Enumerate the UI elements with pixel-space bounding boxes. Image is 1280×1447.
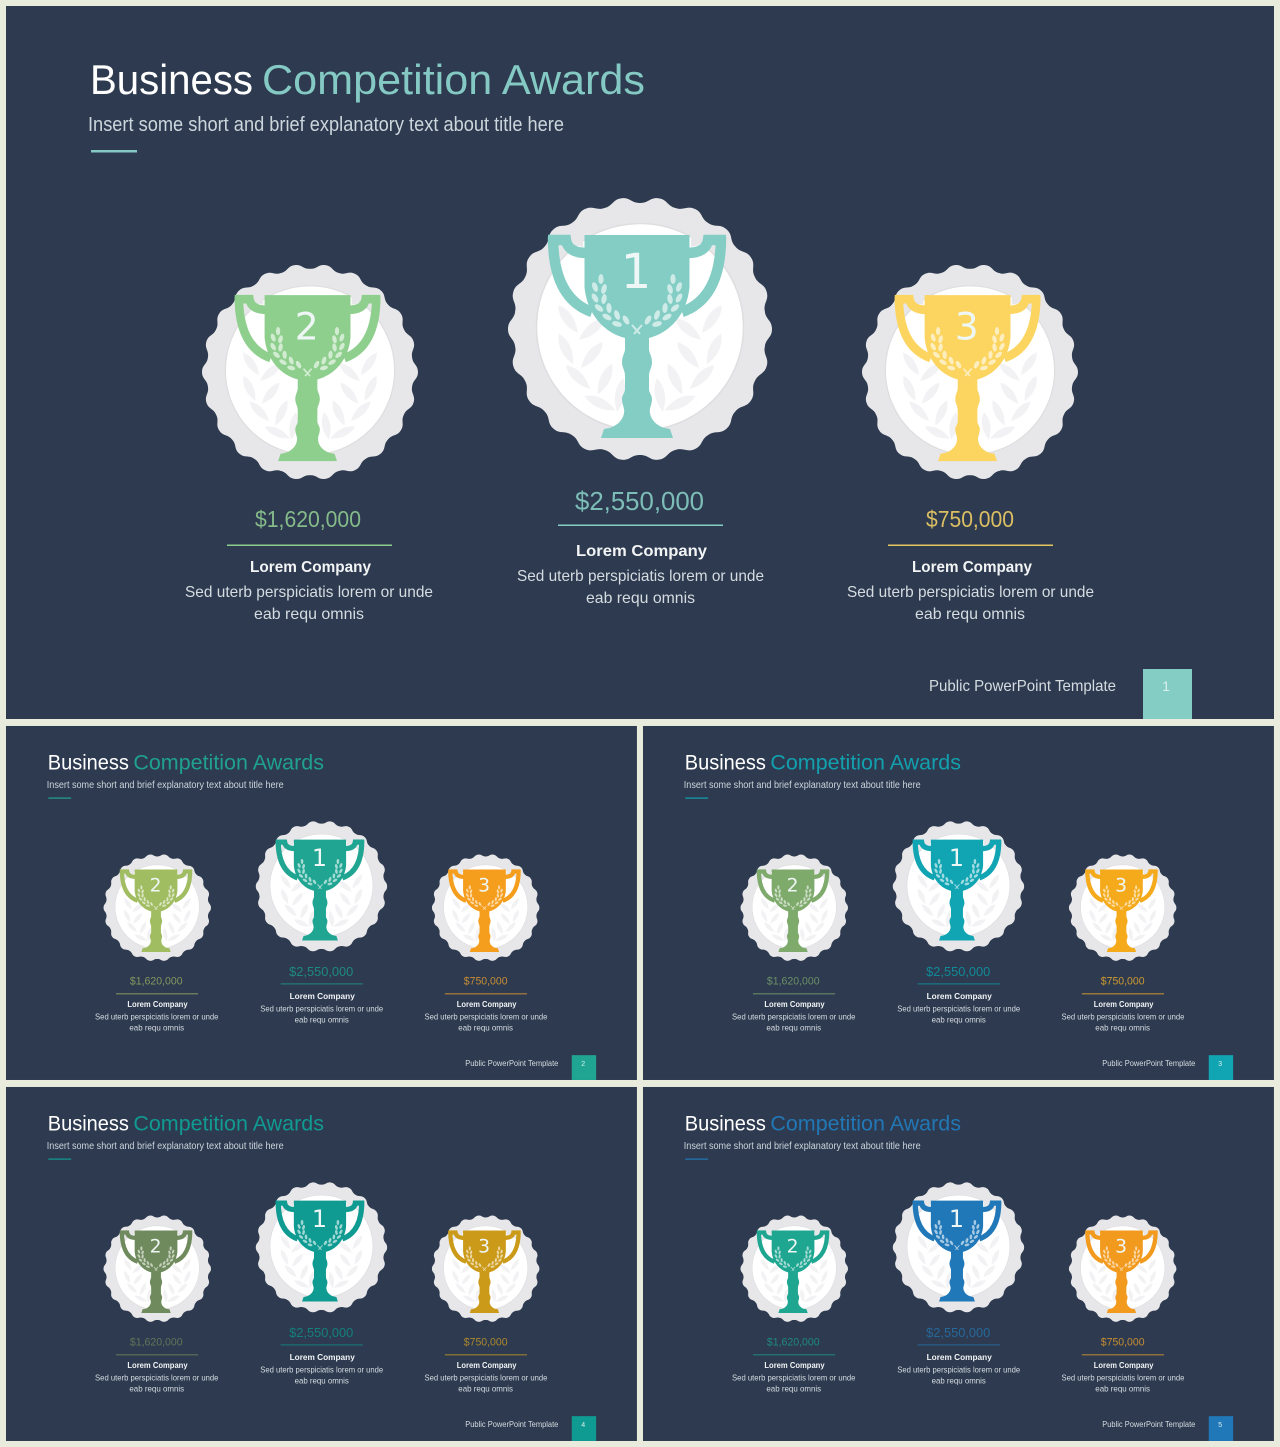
prize block 1: eab requ omnis <box>932 1015 986 1024</box>
prize block 2: Sed uterb perspiciatis lorem or unde <box>95 1373 219 1382</box>
prize block 1: $2,550,000 <box>926 1325 990 1340</box>
prize block 2: Lorem Company <box>250 559 371 576</box>
icon: trophy badge 3: 3 <box>1115 1236 1127 1257</box>
footer label: Public PowerPoint Template <box>465 1420 559 1429</box>
title accent line <box>685 797 708 799</box>
prize block 2: eab requ omnis <box>766 1023 821 1032</box>
prize block 2: Sed uterb perspiciatis lorem or unde <box>95 1012 219 1021</box>
prize block 1: Lorem Company <box>290 992 355 1001</box>
title: Competition Awards <box>770 752 961 775</box>
prize block 3: eab requ omnis <box>458 1023 513 1032</box>
icon: trophy badge 2 <box>187 250 433 494</box>
prize block 1: Sed uterb perspiciatis lorem or unde <box>897 1365 1021 1374</box>
icon: trophy badge 1 <box>884 1173 1033 1322</box>
prize block 1: Sed uterb perspiciatis lorem or unde <box>897 1004 1021 1013</box>
title: Business <box>48 752 129 775</box>
prize block 1: Lorem Company <box>576 543 707 560</box>
prize block 1 <box>260 1325 384 1385</box>
icon: trophy badge 2: 2 <box>150 875 162 896</box>
prize block 1 <box>260 964 384 1024</box>
footer label: Public PowerPoint Template <box>1102 1420 1196 1429</box>
title: Business <box>685 752 766 775</box>
page number box: 1 <box>1162 678 1170 694</box>
prize block 1: $2,550,000 <box>289 1325 353 1340</box>
icon: trophy badge 3: 3 <box>1115 875 1127 896</box>
icon: trophy badge 3 <box>1061 847 1184 968</box>
prize block 3: eab requ omnis <box>915 606 1025 623</box>
prize block 2: $1,620,000 <box>767 976 820 988</box>
prize block 2 <box>95 976 219 1032</box>
prize block 3: Lorem Company <box>457 1000 517 1009</box>
title accent line <box>48 1158 71 1160</box>
prize block 2 <box>732 1337 856 1393</box>
prize block 1: eab requ omnis <box>932 1376 986 1385</box>
prize block 3: Sed uterb perspiciatis lorem or unde <box>424 1373 548 1382</box>
title: Business <box>90 56 253 103</box>
footer label: Public PowerPoint Template <box>465 1059 559 1068</box>
title: Competition Awards <box>262 56 645 103</box>
prize block 3: Sed uterb perspiciatis lorem or unde <box>1061 1012 1185 1021</box>
icon: trophy badge 2: 2 <box>150 1236 162 1257</box>
prize block 3: Sed uterb perspiciatis lorem or unde <box>424 1012 548 1021</box>
prize block 2: Sed uterb perspiciatis lorem or unde <box>732 1373 856 1382</box>
icon: trophy badge 1: 1 <box>949 1205 964 1233</box>
prize block 1: Sed uterb perspiciatis lorem or unde <box>517 568 764 585</box>
prize block 3: Lorem Company <box>1094 1361 1154 1370</box>
prize block 3: Sed uterb perspiciatis lorem or unde <box>847 584 1094 601</box>
title: Business <box>685 1113 766 1136</box>
subtitle: Insert some short and brief explanatory text about title here <box>684 780 921 791</box>
title <box>48 752 324 775</box>
prize block 1 <box>897 964 1021 1024</box>
title: Business <box>48 1113 129 1136</box>
prize block 3 <box>1061 976 1185 1032</box>
title: Competition Awards <box>770 1113 961 1136</box>
prize block 3: eab requ omnis <box>1095 1384 1150 1393</box>
prize block 1 <box>897 1325 1021 1385</box>
page number box: 2 <box>581 1061 585 1068</box>
footer label: Public PowerPoint Template <box>929 678 1116 695</box>
icon: trophy badge 2 <box>96 1208 219 1329</box>
prize block 3: $750,000 <box>1101 1337 1145 1349</box>
icon: trophy badge 3: 3 <box>478 875 490 896</box>
title accent line <box>685 1158 708 1160</box>
page number box <box>1143 669 1192 719</box>
prize block 2: eab requ omnis <box>254 606 364 623</box>
prize block 2: $1,620,000 <box>130 976 183 988</box>
prize block 2: $1,620,000 <box>255 506 361 532</box>
icon: trophy badge 3 <box>847 250 1093 494</box>
page number box <box>572 1416 596 1441</box>
subtitle: Insert some short and brief explanatory text about title here <box>47 1141 284 1152</box>
icon: trophy badge 1: 1 <box>312 1205 327 1233</box>
title accent line <box>48 797 71 799</box>
page number box: 5 <box>1218 1422 1222 1429</box>
icon: trophy badge 1 <box>489 179 791 479</box>
title: Competition Awards <box>133 1113 324 1136</box>
title <box>685 1113 961 1136</box>
prize block 3: Sed uterb perspiciatis lorem or unde <box>1061 1373 1185 1382</box>
title <box>685 752 961 775</box>
page number box <box>572 1055 596 1080</box>
page number box: 3 <box>1218 1061 1222 1068</box>
icon: trophy badge 1 <box>247 1173 396 1322</box>
prize block 1: eab requ omnis <box>295 1015 349 1024</box>
prize block 1: Sed uterb perspiciatis lorem or unde <box>260 1365 384 1374</box>
prize block 2: Sed uterb perspiciatis lorem or unde <box>185 584 433 601</box>
prize block 2: eab requ omnis <box>766 1384 821 1393</box>
prize block 3: $750,000 <box>464 976 508 988</box>
panel: large slide 1 <box>6 6 1274 719</box>
icon: trophy badge 3 <box>424 847 547 968</box>
prize block 2: eab requ omnis <box>129 1023 184 1032</box>
icon: trophy badge 3: 3 <box>478 1236 490 1257</box>
prize block 2: Lorem Company <box>764 1361 825 1370</box>
prize block 1: $2,550,000 <box>575 486 704 516</box>
icon: trophy badge 1 <box>247 812 396 961</box>
icon: trophy badge 3 <box>1061 1208 1184 1329</box>
icon: trophy badge 1: 1 <box>621 244 651 300</box>
prize block 1: Sed uterb perspiciatis lorem or unde <box>260 1004 384 1013</box>
icon: trophy badge 1 <box>884 812 1033 961</box>
prize block 2: eab requ omnis <box>129 1384 184 1393</box>
prize block 3: $750,000 <box>464 1337 508 1349</box>
icon: trophy badge 2: 2 <box>787 875 799 896</box>
footer label: Public PowerPoint Template <box>1102 1059 1196 1068</box>
prize block 3 <box>847 506 1094 623</box>
prize block 1: Lorem Company <box>290 1353 355 1362</box>
prize block 2: Lorem Company <box>127 1000 188 1009</box>
title accent line <box>91 150 137 152</box>
title: Competition Awards <box>133 752 324 775</box>
page number box: 4 <box>581 1422 585 1429</box>
prize block 3: Lorem Company <box>1094 1000 1154 1009</box>
prize block 3 <box>1061 1337 1185 1393</box>
panel: small slide 2 <box>6 726 637 1080</box>
prize block 2: Sed uterb perspiciatis lorem or unde <box>732 1012 856 1021</box>
prize block 2: $1,620,000 <box>130 1337 183 1349</box>
prize block 3: $750,000 <box>926 506 1014 532</box>
prize block 1: $2,550,000 <box>289 964 353 979</box>
prize block 1: $2,550,000 <box>926 964 990 979</box>
icon: trophy badge 2 <box>733 847 856 968</box>
icon: trophy badge 3: 3 <box>955 304 979 348</box>
title <box>48 1113 324 1136</box>
subtitle: Insert some short and brief explanatory text about title here <box>684 1141 921 1152</box>
prize block 3 <box>424 1337 548 1393</box>
icon: trophy badge 2 <box>96 847 219 968</box>
panel: small slide 3 <box>643 726 1274 1080</box>
icon: trophy badge 1: 1 <box>949 844 964 872</box>
prize block 1: Lorem Company <box>927 1353 992 1362</box>
icon: trophy badge 2 <box>733 1208 856 1329</box>
prize block 3: $750,000 <box>1101 976 1145 988</box>
icon: trophy badge 2: 2 <box>295 304 319 348</box>
prize block 3 <box>424 976 548 1032</box>
page number box <box>1209 1055 1233 1080</box>
prize block 2: $1,620,000 <box>767 1337 820 1349</box>
prize block 1: eab requ omnis <box>586 590 695 607</box>
prize block 3: eab requ omnis <box>458 1384 513 1393</box>
prize block 3: eab requ omnis <box>1095 1023 1150 1032</box>
prize block 1: eab requ omnis <box>295 1376 349 1385</box>
panel: small slide 4 <box>6 1087 637 1441</box>
panel: small slide 5 <box>643 1087 1274 1441</box>
prize block 1 <box>517 486 764 607</box>
icon: trophy badge 1: 1 <box>312 844 327 872</box>
prize block 2 <box>732 976 856 1032</box>
icon: trophy badge 3 <box>424 1208 547 1329</box>
prize block 2 <box>95 1337 219 1393</box>
subtitle: Insert some short and brief explanatory text about title here <box>47 780 284 791</box>
prize block 3: Lorem Company <box>457 1361 517 1370</box>
page number box <box>1209 1416 1233 1441</box>
prize block 2: Lorem Company <box>764 1000 825 1009</box>
prize block 1: Lorem Company <box>927 992 992 1001</box>
prize block 2: Lorem Company <box>127 1361 188 1370</box>
icon: trophy badge 2: 2 <box>787 1236 799 1257</box>
subtitle: Insert some short and brief explanatory text about title here <box>88 114 564 136</box>
prize block 3: Lorem Company <box>912 559 1032 576</box>
title <box>90 56 645 103</box>
prize block 2 <box>185 506 433 623</box>
